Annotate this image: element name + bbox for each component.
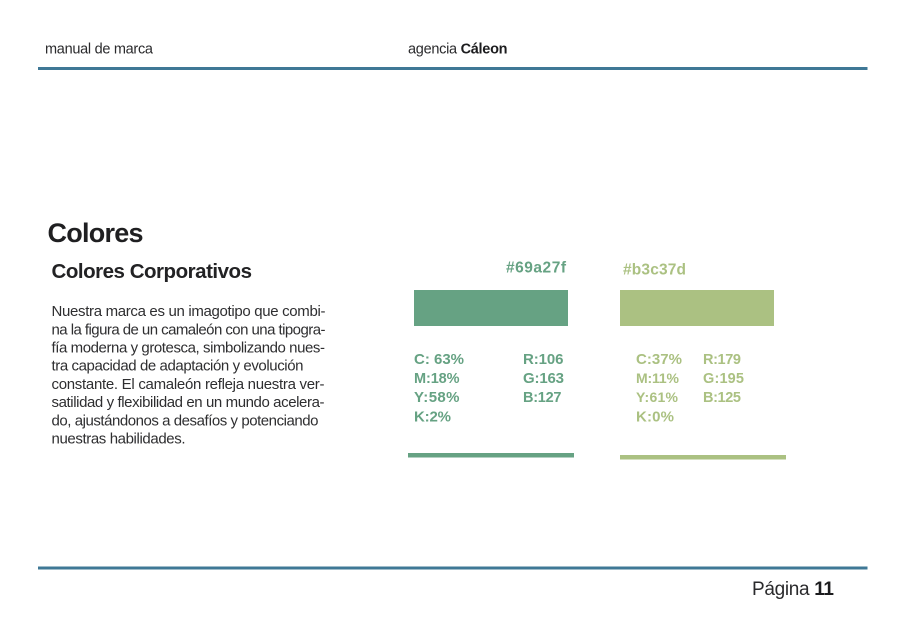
body text paragraph <box>52 303 326 448</box>
header: agency name: agencia Cáleon <box>408 42 508 58</box>
CMYK values green: K:2% <box>414 408 451 426</box>
body text paragraph: Nuestra marca es un imagotipo que combi- <box>52 303 326 320</box>
color panel: light green #b3c37d <box>620 262 786 460</box>
title: Colores <box>48 218 144 248</box>
CMYK values light green <box>636 351 682 426</box>
hex label light green: #b3c37d <box>623 262 686 278</box>
CMYK values light green: C:37% <box>636 351 682 368</box>
CMYK values light green: M:11% <box>636 370 680 386</box>
swatch green <box>414 290 568 326</box>
RGB values light green: R:179 <box>703 352 741 368</box>
body text paragraph: constante. El camaleón refleja nuestra ver- <box>52 376 324 393</box>
body text paragraph: fía moderna y grotesca, simbolizando nues- <box>52 340 325 356</box>
page number: Página 11 <box>752 579 834 600</box>
RGB values light green: B:125 <box>703 390 741 406</box>
RGB values green: B:127 <box>523 390 562 406</box>
CMYK values green: M:18% <box>414 371 460 387</box>
body text paragraph: tra capacidad de adaptación y evolución <box>52 358 304 375</box>
CMYK values light green: K:0% <box>636 408 674 426</box>
RGB values green: R:106 <box>523 351 564 368</box>
CMYK values green: Y:58% <box>414 389 460 406</box>
header: brand manual label: manual de marca <box>45 42 154 58</box>
body text paragraph: do, ajustándonos a desafíos y potenciando <box>52 412 318 429</box>
swatch light green <box>620 290 774 326</box>
RGB values green: G:163 <box>523 370 564 387</box>
CMYK values green <box>414 351 464 426</box>
body text paragraph: satilidad y flexibilidad en un mundo acelera- <box>52 394 324 411</box>
hex label green: #69a27f <box>506 260 567 276</box>
CMYK values green: C: 63% <box>414 351 464 368</box>
color panel: green #69a27f <box>408 260 574 458</box>
CMYK values light green: Y:61% <box>636 389 679 405</box>
RGB values light green <box>703 352 744 406</box>
RGB values green <box>523 351 564 406</box>
subtitle: Colores Corporativos <box>52 260 252 283</box>
body text paragraph: nuestras habilidades. <box>52 431 186 448</box>
body text paragraph: na la figura de un camaleón con una tipogra- <box>52 321 326 338</box>
RGB values light green: G:195 <box>703 371 744 387</box>
